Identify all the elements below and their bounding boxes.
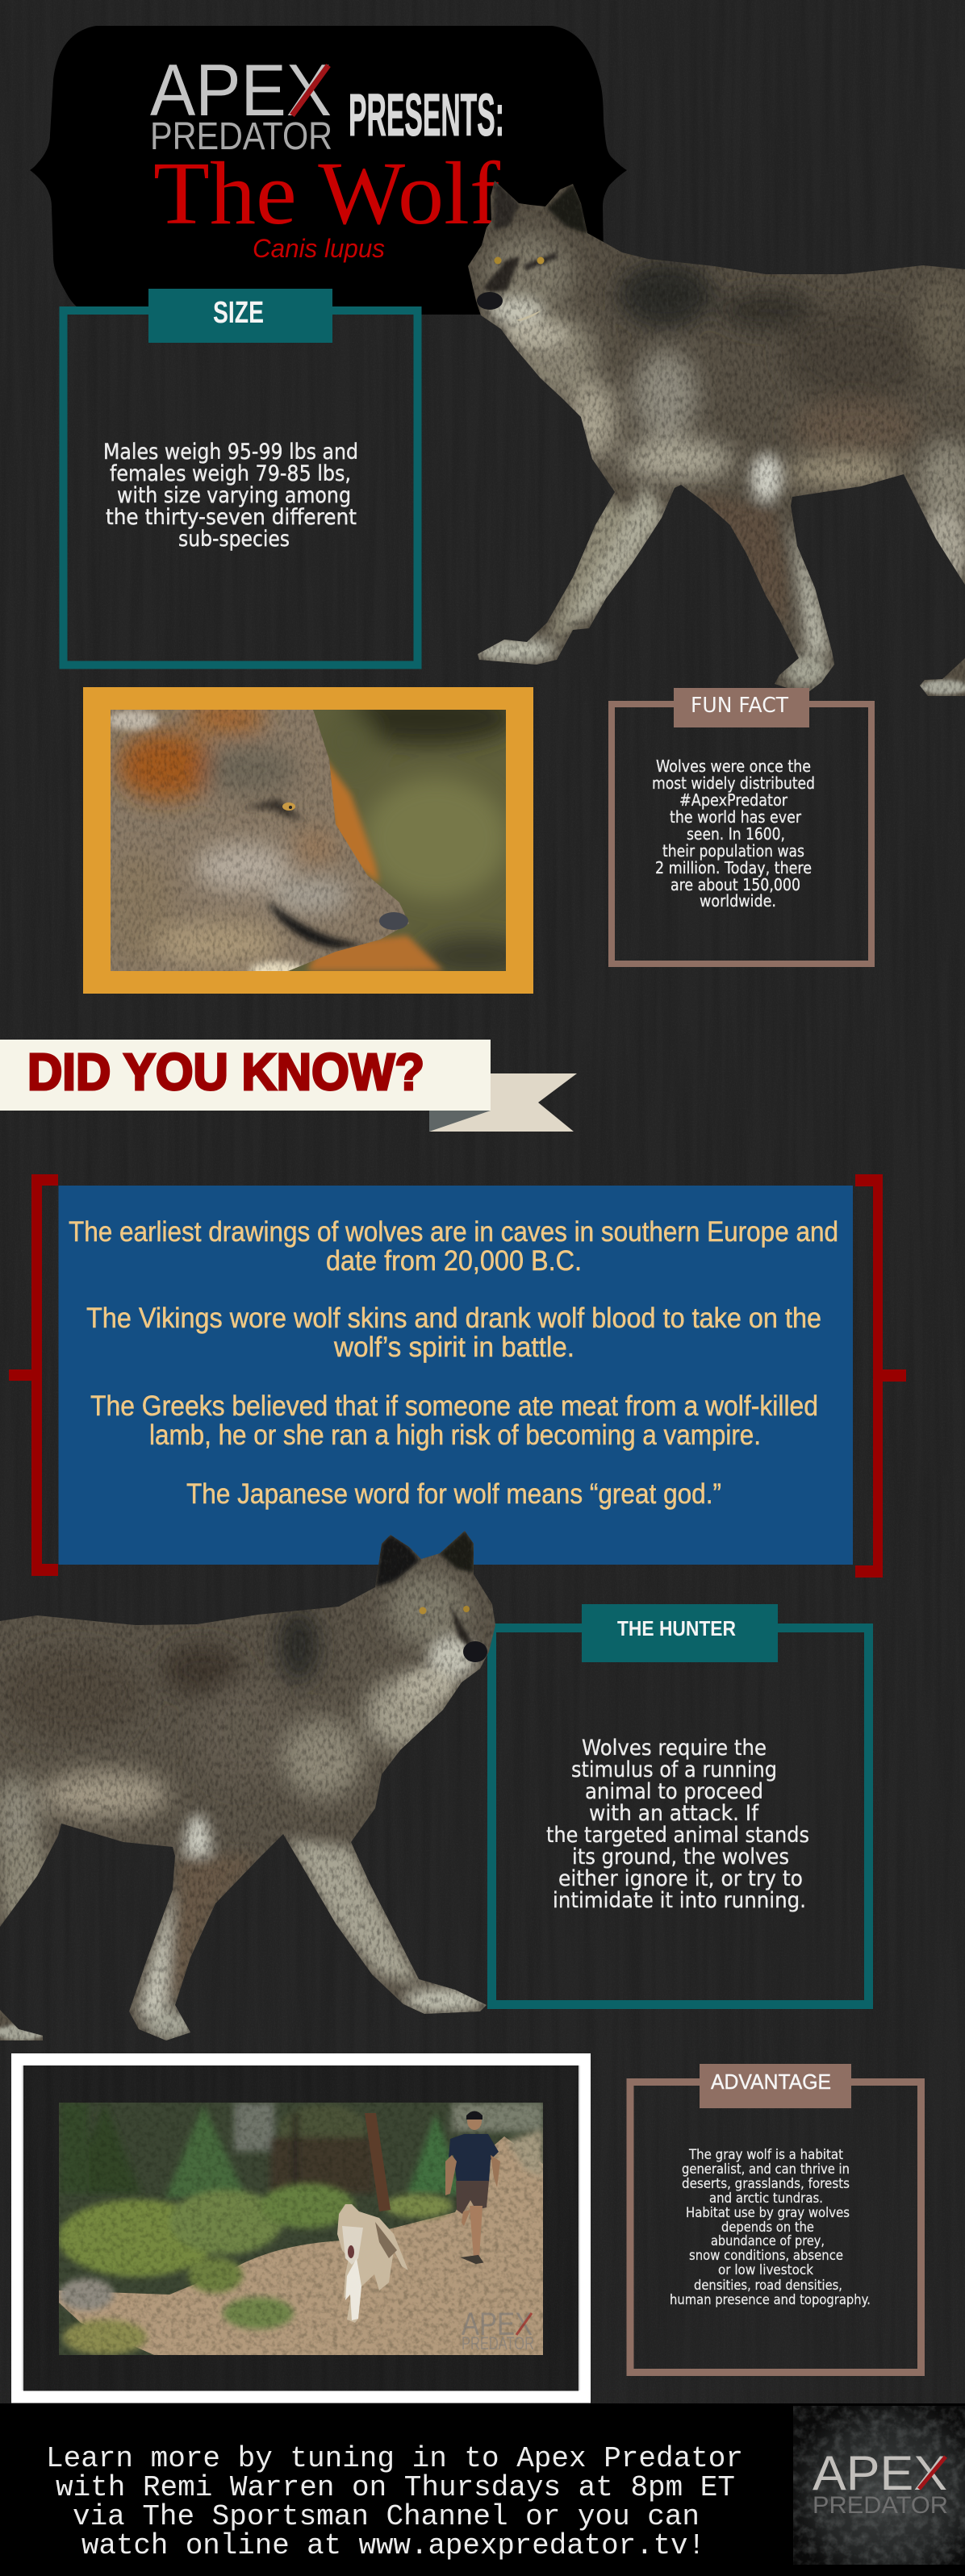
footer text: Learn more by tuning in to Apex Predator [46, 2442, 743, 2475]
fun fact text: are about 150,000 [670, 875, 800, 894]
panel: fun fact [612, 688, 871, 964]
eye and nose [282, 802, 408, 930]
hunter text: its ground, the wolves [572, 1844, 789, 1869]
title: The Wolf: The Wolf [153, 144, 500, 244]
running wolf [337, 2204, 408, 2323]
hunter text: stimulus of a running [571, 1757, 777, 1782]
fun fact text: #ApexPredator [679, 790, 788, 810]
wolf eyes and nose [420, 1606, 487, 1662]
size text: the thirty-seven different [106, 505, 357, 530]
facts text: The Japanese word for wolf means “great god.” [186, 1478, 721, 1510]
facts text: The Vikings wore wolf skins and drank wolf blood to take on the [86, 1303, 821, 1334]
size tab: SIZE [213, 296, 264, 330]
advantage text: or low livestock [718, 2262, 813, 2278]
footer text: watch online at www.apexpredator.tv! [81, 2529, 705, 2562]
sandy trail [59, 2136, 543, 2355]
wolf eyes and nose [477, 256, 544, 321]
facts text [69, 1216, 838, 1510]
logo: Apex Predator: APEX [150, 50, 332, 131]
facts text: The earliest drawings of wolves are in caves in southern Europe and [69, 1216, 838, 1248]
subtitle: Canis lupus: Canis lupus [253, 234, 385, 263]
fun fact text: seen. In 1600, [687, 824, 785, 844]
panel: the hunter [492, 1604, 868, 2005]
advantage text: human presence and topography. [670, 2292, 871, 2308]
hunter text: animal to proceed [585, 1779, 763, 1804]
footer logo tile: PREDATOR [813, 2492, 948, 2519]
photo watermark logo [462, 2307, 534, 2353]
fun fact text: the world has ever [670, 807, 802, 827]
banner heading: DID YOU KNOW? [27, 1043, 424, 1101]
fun fact text: their population was [662, 841, 804, 861]
hunter text: the targeted animal stands [546, 1823, 809, 1848]
hunter tab [582, 1604, 778, 1662]
advantage tab: ADVANTAGE [711, 2070, 831, 2094]
hunter text: either ignore it, or try to [558, 1866, 803, 1891]
advantage text: Habitat use by gray wolves [686, 2205, 850, 2221]
advantage text [670, 2147, 871, 2308]
size text: sub-species [178, 527, 290, 552]
facts text: The Greeks believed that if someone ate meat from a wolf-killed [90, 1390, 818, 1422]
hunter text: Wolves require the [582, 1736, 767, 1761]
footer logo tile: APEX [813, 2446, 947, 2500]
logo: Apex Predator: PREDATOR [150, 115, 332, 158]
advantage text: densities, road densities, [694, 2278, 842, 2294]
footer band [0, 2403, 965, 2576]
fun fact text [652, 757, 815, 911]
facts text: wolf’s spirit in battle. [333, 1332, 574, 1363]
advantage tab [700, 2064, 851, 2108]
photo: wolf profile in orange frame [83, 687, 533, 994]
tree trunk [365, 2113, 391, 2211]
footer logo tile [793, 2406, 965, 2565]
runner [445, 2111, 500, 2262]
wolf photo cut-out, upper [460, 173, 965, 698]
photo watermark logo: PREDATOR [462, 2333, 534, 2353]
advantage text: The gray wolf is a habitat [688, 2147, 843, 2163]
banner: did you know [0, 1040, 577, 1132]
advantage text: snow conditions, absence [689, 2248, 843, 2264]
fun fact tab [674, 688, 809, 727]
left bracket [9, 1174, 58, 1576]
photo: runner and wolf in white frame [18, 2060, 584, 2397]
size text [103, 440, 358, 552]
size text: Males weigh 95-99 lbs and [103, 440, 358, 465]
fun fact text: most widely distributed [652, 773, 815, 793]
advantage text: abundance of prey, [711, 2233, 825, 2249]
advantage text: deserts, grasslands, forests [682, 2176, 850, 2192]
size text: with size varying among [117, 483, 351, 508]
wolf photo cut-out, lower [0, 1524, 500, 2045]
header plaque [30, 26, 627, 315]
panel: advantage [630, 2064, 921, 2373]
footer text: via The Sportsman Channel or you can [73, 2500, 700, 2533]
fun fact text: worldwide. [700, 891, 776, 911]
hunter text: with an attack. If [589, 1801, 759, 1826]
facts text: date from 20,000 B.C. [326, 1245, 582, 1277]
advantage text: generalist, and can thrive in [682, 2161, 850, 2178]
foliage texture [59, 2103, 543, 2355]
facts text: lamb, he or she ran a high risk of becoming a vampire. [149, 1419, 761, 1451]
size tab [148, 289, 332, 343]
photo watermark logo: APEX [462, 2307, 533, 2342]
right bracket [855, 1174, 906, 1578]
hunter text [546, 1736, 809, 1913]
advantage text: depends on the [721, 2220, 814, 2236]
size text: females weigh 79-85 lbs, [110, 461, 351, 486]
panel: size [63, 289, 418, 665]
footer text: with Remi Warren on Thursdays at 8pm ET [56, 2471, 735, 2504]
hunter tab: THE HUNTER [617, 1616, 736, 1640]
panel: facts with brackets [9, 1174, 906, 1578]
fun fact text: 2 million. Today, there [655, 858, 812, 877]
fun fact tab: FUN FACT [691, 694, 788, 718]
fun fact text: Wolves were once the [656, 757, 811, 776]
advantage text: and arctic tundras. [709, 2190, 823, 2207]
header plaque: PRESENTS: [349, 81, 504, 148]
hunter text: intimidate it into running. [553, 1888, 806, 1913]
footer text [46, 2442, 743, 2562]
